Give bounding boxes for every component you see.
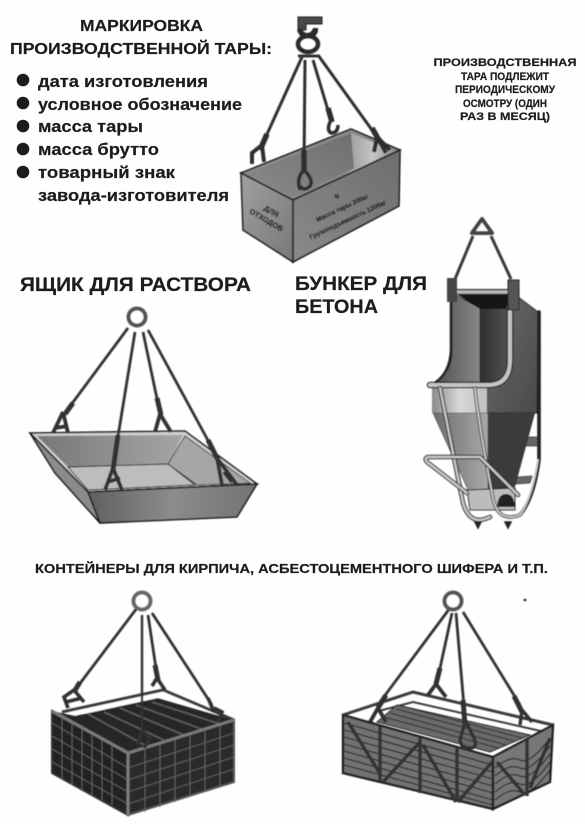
inspection note: РАЗ В МЕСЯЦ) [460, 111, 550, 123]
illustration: concrete bunker [426, 219, 539, 528]
label on right face [298, 177, 388, 241]
marking list with bullets: масса брутто [38, 140, 159, 159]
illustration: mortar tray on slings [30, 308, 257, 523]
inspection note: ОСМОТРУ (ОДИН [463, 98, 547, 110]
crate side wavy slats [495, 738, 550, 800]
slab lines [384, 706, 522, 748]
inner top shadow [455, 293, 510, 309]
label on right face: Грузоподъемность 1200кг [309, 199, 388, 241]
inspection note [434, 57, 577, 123]
side panel [487, 297, 538, 413]
tube frame [426, 292, 539, 520]
heading: marking of production containers [10, 18, 272, 58]
bunker slings [455, 236, 511, 279]
inspection note: ПРОИЗВОДСТВЕННАЯ [434, 57, 577, 69]
mesh lines [52, 716, 234, 812]
inner left wall [432, 293, 480, 385]
illustration: slatted wooden crate [343, 592, 553, 809]
bricks on top [52, 698, 234, 753]
back slings and hooks [370, 608, 452, 728]
back slings and hooks [53, 328, 171, 433]
heading: marking of production containers: МАРКИРОВКА [80, 18, 203, 35]
crate front [343, 715, 493, 809]
triangular link [472, 219, 492, 233]
brick rows [88, 702, 220, 748]
label on left face: ДЛЯ [262, 203, 280, 219]
bottom inner supports [497, 494, 515, 507]
heading: marking of production containers: ПРОИЗВОДСТВЕННОЙ ТАРЫ: [10, 39, 272, 58]
heading: containers: КОНТЕЙНЕРЫ ДЛЯ КИРПИЧА, АСБЕСТОЦЕМЕНТНОГО ШИФЕРА И Т.П. [35, 561, 548, 576]
inspection note: ПЕРИОДИЧЕСКОМУ [455, 84, 555, 96]
front slings and hooks [456, 612, 532, 748]
back slings and hooks [64, 608, 165, 708]
illustration: waste container on slings [241, 17, 400, 262]
clamps [447, 278, 519, 310]
crate back rails [343, 692, 553, 732]
label on right face: N [334, 194, 341, 201]
band left [432, 388, 487, 413]
back slings and hooks [313, 55, 390, 153]
side struts [516, 437, 538, 484]
tray front side [88, 484, 257, 523]
label on right face: Масса тары 200кг [315, 193, 370, 224]
left face [241, 173, 293, 262]
ring [444, 592, 462, 610]
hopper right [488, 413, 535, 490]
crate side [493, 725, 553, 809]
marking list with bullets: дата изготовления [38, 72, 208, 91]
box interior [241, 129, 400, 200]
bottom prongs [475, 522, 511, 528]
inner right wall [480, 308, 510, 385]
frame edges [52, 711, 234, 815]
front slings and hooks [105, 330, 237, 490]
back rail [62, 690, 234, 720]
front slings and hooks [138, 613, 222, 748]
heading: mortar box: ЯЩИК ДЛЯ РАСТВОРА [20, 275, 251, 296]
stray dot [524, 599, 526, 601]
ring [134, 592, 150, 610]
heading: concrete bunker: БУНКЕР ДЛЯ [295, 274, 427, 295]
hopper left [433, 413, 488, 490]
label on left face [248, 198, 290, 234]
tray rim and interior [30, 431, 257, 492]
label on left face: ОТХОДОВ [248, 207, 285, 234]
marking list with bullets: условное обозначение [38, 95, 242, 114]
front slings and hooks [252, 57, 311, 190]
mesh left face [52, 711, 128, 815]
marking list with bullets: завода-изготовителя [38, 186, 229, 205]
inspection note: ТАРА ПОДЛЕЖИТ [461, 71, 549, 83]
marking list with bullets: товарный знак [38, 163, 176, 182]
mesh right face [128, 720, 234, 815]
stacked slabs [377, 705, 530, 752]
ring [128, 308, 146, 326]
marking list with bullets [17, 72, 242, 205]
ring and hook [297, 17, 322, 56]
crate front slats [344, 723, 493, 805]
marking list with bullets: масса тары [38, 117, 143, 136]
heading: concrete bunker: БЕТОНА [295, 297, 378, 318]
bottom outlet [467, 488, 515, 510]
tray left side [30, 433, 100, 523]
heading: concrete bunker [295, 274, 427, 318]
right face [293, 150, 400, 262]
illustration: brick mesh container [52, 592, 234, 815]
crate posts and braces [348, 722, 550, 802]
